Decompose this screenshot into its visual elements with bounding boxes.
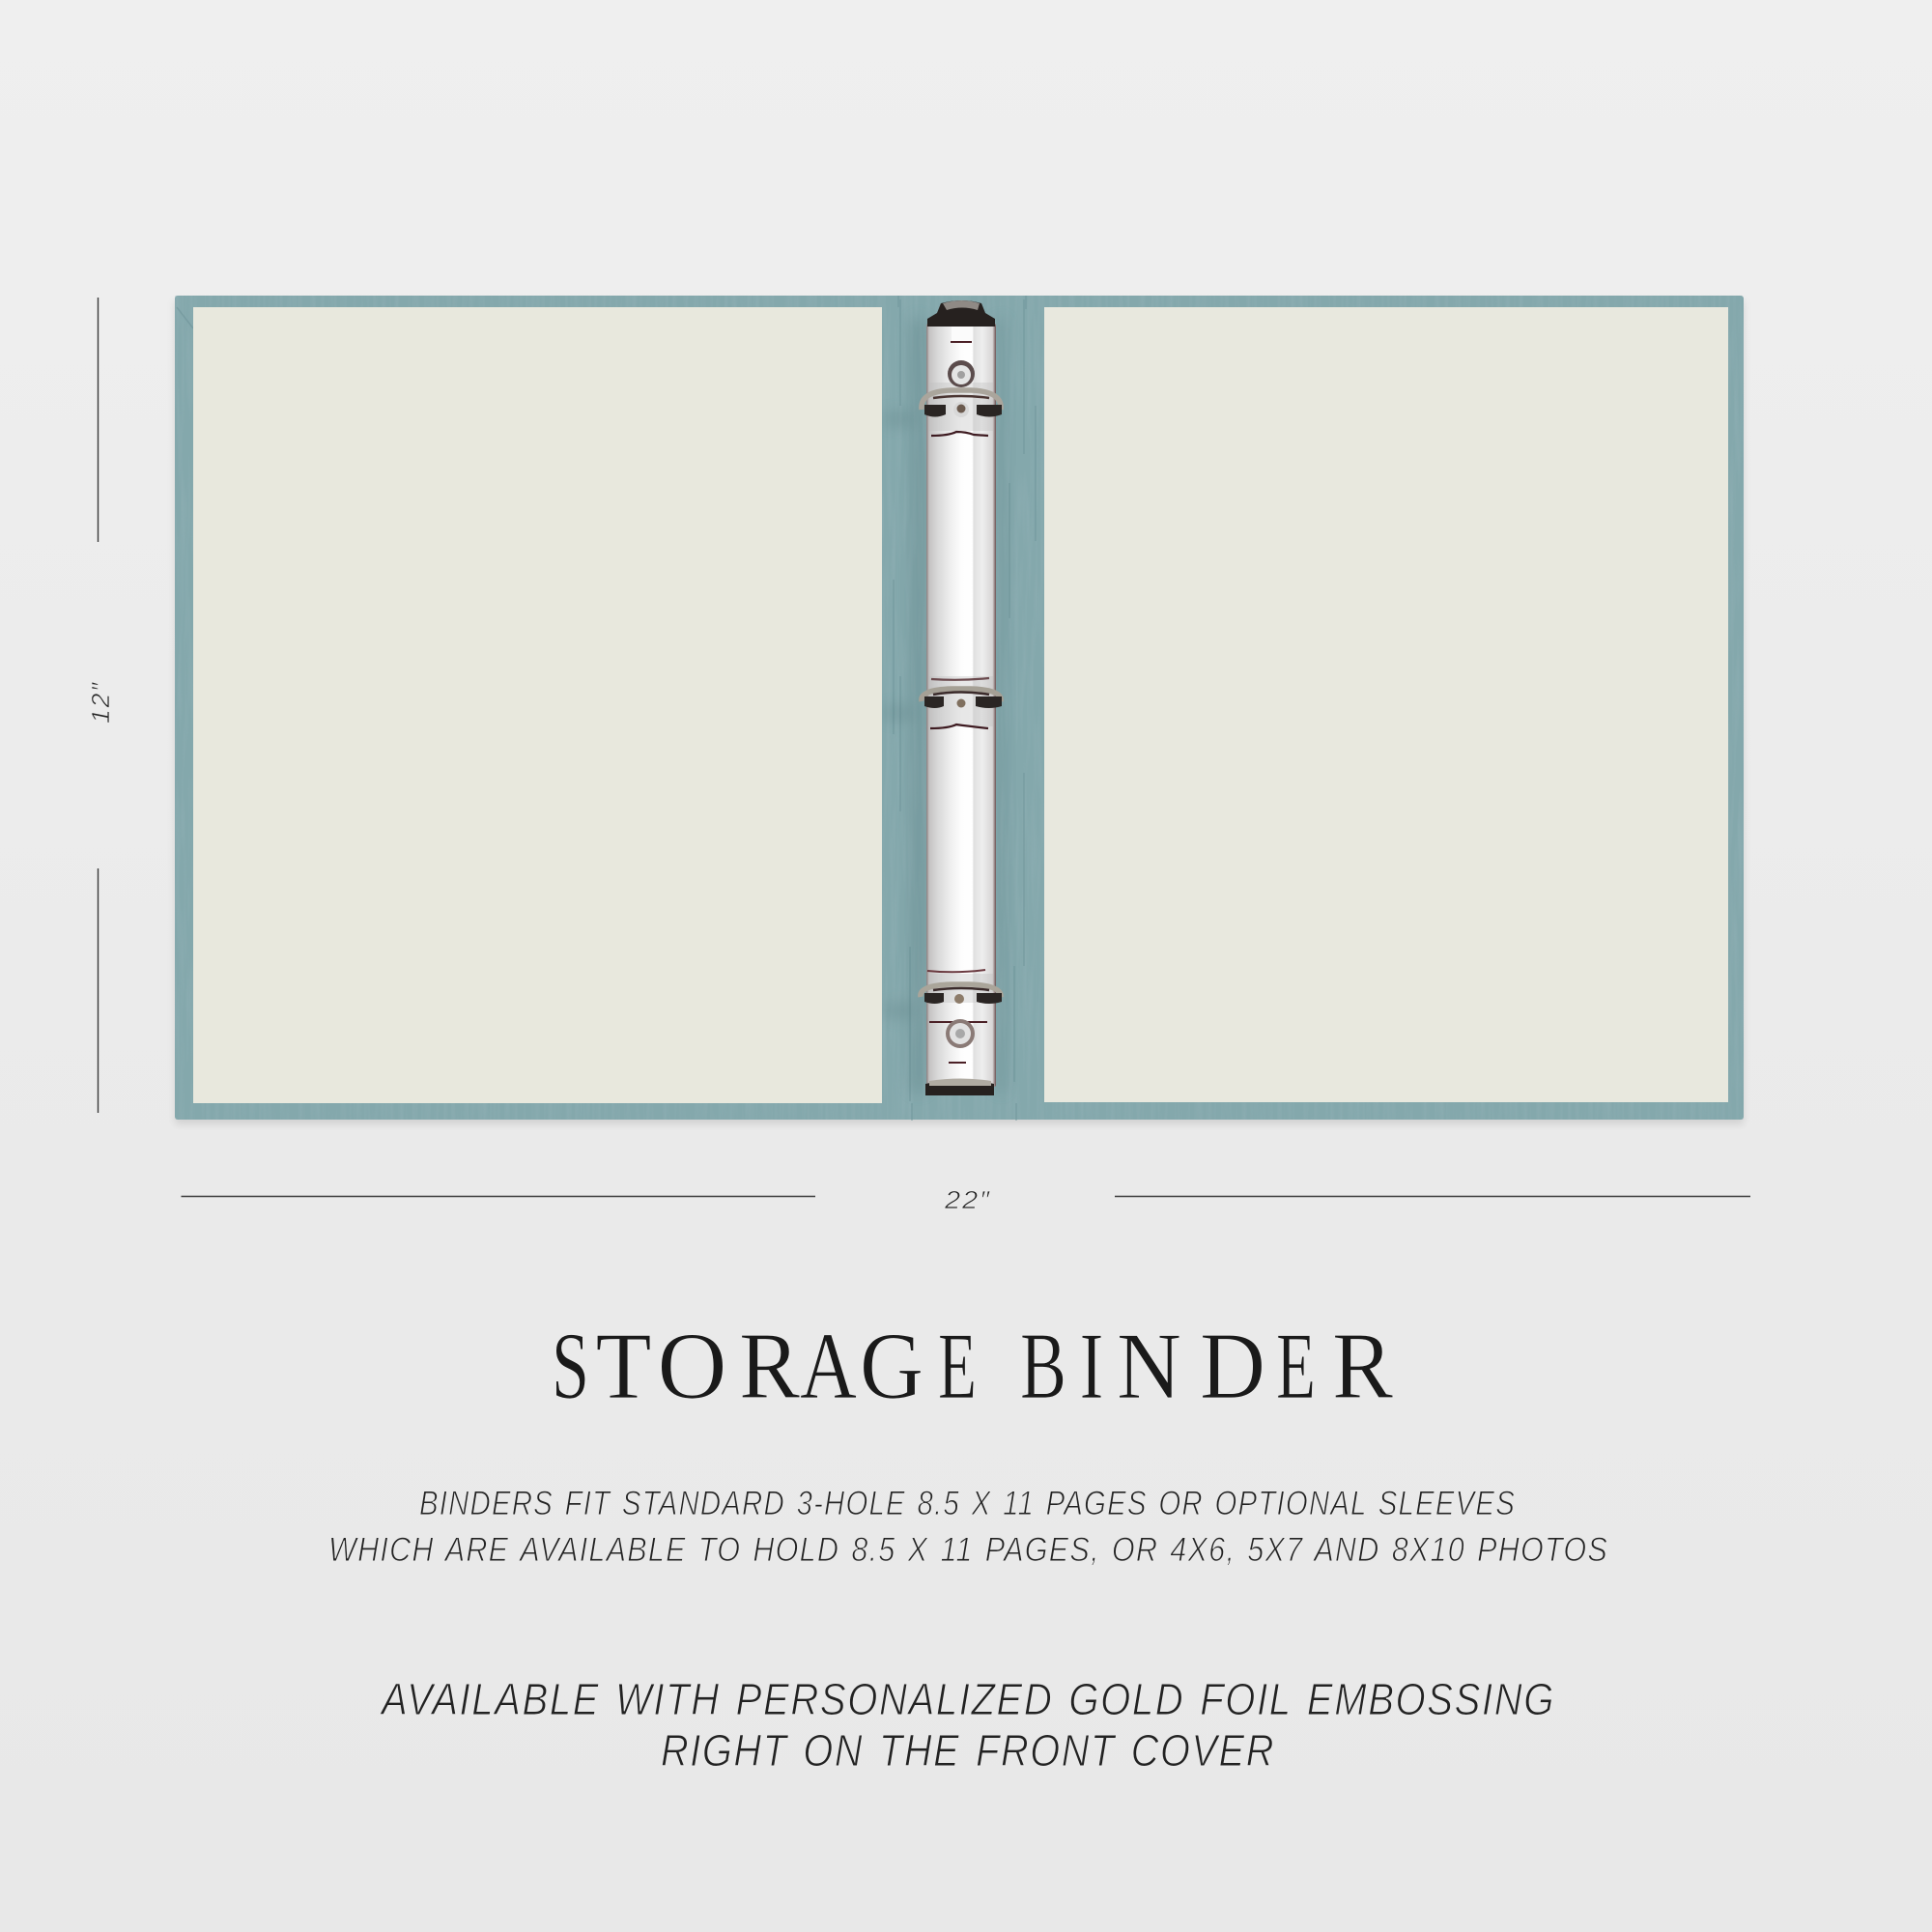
top crimp [951,341,972,343]
description text: WHICH ARE AVAILABLE TO HOLD 8.5 X 11 PAGES, OR 4X6, 5X7 AND 8X10 PHOTOS [328,1531,1608,1569]
metal body [926,324,996,1087]
title: E [938,1314,977,1419]
binder open view [175,296,1744,1124]
title: D [1200,1314,1265,1419]
spine shadow [884,319,1005,1092]
description text: BINDERS FIT STANDARD 3-HOLE 8.5 X 11 PAGES OR OPTIONAL SLEEVES [419,1485,1516,1522]
bottom screw [929,1019,987,1063]
left page [193,307,882,1103]
title: E [1276,1314,1316,1419]
right page [1044,307,1728,1102]
embossing note: RIGHT ON THE FRONT COVER [661,1725,1275,1776]
title: A [800,1314,857,1419]
embossing note [379,1674,1555,1776]
binder cover [175,296,1744,1120]
bottom cap [925,1078,994,1095]
middle ring [922,678,1002,728]
height dimension: 12 inches: 12″ [86,681,115,724]
title: I [1080,1314,1103,1419]
title: O [657,1314,726,1419]
top screw [948,360,975,387]
embossing note: AVAILABLE WITH PERSONALIZED GOLD FOIL EMBOSSING [379,1674,1555,1724]
title: T [595,1314,651,1419]
top ring [922,390,1002,417]
title: G [860,1314,923,1419]
title: R [1332,1314,1393,1419]
ring mechanism [921,300,1002,1095]
bottom ring [921,970,1002,1004]
title: N [1117,1314,1181,1419]
width dimension: 22 inches: 22″ [944,1185,991,1214]
description text [328,1485,1608,1569]
title: S [552,1314,589,1419]
top cap [927,300,995,327]
title: B [1020,1314,1066,1419]
title: R [739,1314,800,1419]
